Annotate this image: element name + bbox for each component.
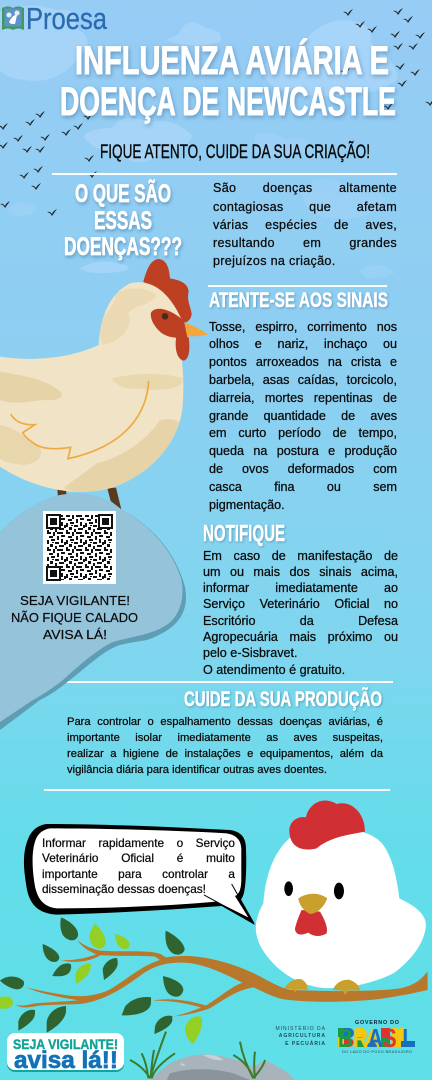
speech bubble text: disseminação dessas doenças! — [42, 882, 206, 896]
QR caption: NÃO FIQUE CALADO — [11, 610, 138, 625]
logo: governo do brasil: GOVERNO DO — [355, 1020, 399, 1026]
text block: notifique: Em caso de manifestação de — [203, 548, 398, 562]
colour blocks — [338, 1028, 415, 1047]
title — [60, 38, 396, 124]
text block: o que são — [212, 181, 397, 268]
twigs — [61, 953, 207, 1009]
branch with leaves — [0, 917, 428, 1044]
divider — [52, 173, 397, 175]
body — [0, 282, 184, 492]
text block: sinais: grande quantidade de aves — [209, 409, 397, 423]
heading: o que são essas doenças — [64, 178, 182, 261]
text block: cuide da produção: importante isolar imediatamente as aves suspeitas, — [67, 732, 383, 744]
face band — [151, 309, 187, 338]
white chicken — [256, 801, 426, 995]
text block: sinais: Tosse, espirro, corrimento nos — [209, 320, 397, 334]
birds — [0, 8, 432, 216]
QR caption — [11, 593, 138, 642]
wattle — [295, 910, 327, 936]
logo: governo do brasil: DO LADO DO POVO BRASILEIRO — [342, 1049, 412, 1054]
comb — [143, 259, 192, 323]
callout blob with QR — [0, 494, 186, 730]
speech bubble text: Veterinário Oficial é muito — [42, 851, 235, 865]
wattle — [176, 335, 189, 361]
blob — [0, 494, 182, 722]
text block: sinais: em curto período de tempo, — [209, 426, 397, 440]
divider — [44, 789, 390, 791]
badge: seja vigilante avisa lá — [7, 1033, 124, 1074]
legs — [57, 488, 121, 509]
logo: Proesa — [2, 1, 108, 36]
text block: o que são: contagiosas que afetam — [213, 200, 397, 214]
logo: ministério da agricultura: AGRICULTURA — [279, 1033, 326, 1039]
text block: notifique: Serviço Veterinário Oficial no — [203, 597, 398, 611]
heading: o que são essas doenças: DOENÇAS??? — [64, 233, 182, 261]
eyes — [284, 881, 293, 896]
text block: o que são: resultando em grandes — [213, 236, 397, 250]
logo: ministério da agricultura: MINISTÉRIO DA — [275, 1025, 326, 1032]
heading: o que são essas doenças: O QUE SÃO — [75, 178, 171, 208]
text block: cuide da produção — [66, 716, 384, 776]
text block: sinais — [209, 320, 397, 512]
text block: sinais: de ovos deformados com — [209, 462, 397, 476]
body — [256, 829, 426, 988]
eye — [162, 313, 168, 320]
text block: o que são: várias espécies de aves, — [213, 218, 397, 232]
logo: ministério da agricultura: E PECUÁRIA — [285, 1040, 326, 1047]
hen illustration — [0, 259, 208, 509]
speech bubble — [24, 824, 255, 925]
text block: cuide da produção: vigilância diária para identificar outras aves doentes. — [67, 764, 327, 776]
text block: sinais: diarreia, mortes repentinas de — [209, 391, 397, 405]
comb — [289, 801, 365, 849]
blob shadow — [0, 494, 186, 730]
plumage texture — [0, 289, 184, 493]
logo: Proesa: Proesa — [26, 1, 108, 36]
logo: ministério da agricultura — [275, 1025, 326, 1047]
text block: notifique: informar imediatamente ao — [203, 581, 398, 595]
text block: o que são: São doenças altamente — [213, 181, 397, 195]
text block: notifique: O atendimento é gratuito. — [203, 663, 345, 677]
speech bubble text: Informar rapidamente o Serviço — [42, 836, 235, 850]
badge: seja vigilante avisa lá: avisa lá!! — [14, 1047, 118, 1074]
text block: sinais: queda na postura e produção — [209, 444, 397, 458]
text block: sinais: pigmentação. — [209, 498, 285, 512]
rock and grass — [130, 1032, 294, 1080]
dark leaves — [0, 917, 185, 1034]
badge: seja vigilante avisa lá: SEJA VIGILANTE! — [13, 1036, 118, 1052]
beak — [185, 323, 208, 336]
feet — [284, 979, 308, 993]
branch — [15, 940, 428, 1017]
text block: notifique — [202, 548, 398, 677]
divider — [52, 681, 393, 683]
text block: cuide da produção: Para controlar o espalhamento dessas doenças aviárias, é — [67, 716, 383, 728]
text block: notifique: um ou mais dos sinais acima, — [203, 565, 398, 579]
QR caption: SEJA VIGILANTE! — [20, 593, 130, 608]
text block: notifique: Escritório da Defesa — [203, 614, 398, 628]
QR caption: AVISA LÁ! — [43, 627, 107, 642]
QR code — [43, 511, 116, 584]
light leaves — [0, 923, 202, 1044]
text block: notifique: pelo e-Sisbravet. — [203, 646, 298, 660]
speech bubble text — [42, 836, 236, 896]
wing outline — [11, 381, 149, 459]
icon: open book — [2, 6, 24, 30]
speech bubble text: importante para controlar a — [42, 867, 235, 881]
clouds background — [0, 5, 398, 278]
text block: o que são: prejuízos na criação. — [213, 254, 336, 268]
text block: sinais: olhos e nariz, inchaço ou — [209, 337, 397, 351]
text block: sinais: barbela, asas caídas, torcicolo, — [209, 373, 397, 387]
heading: o que são essas doenças: ESSAS — [94, 207, 152, 235]
heading: notifique: NOTIFIQUE — [203, 520, 285, 546]
divider — [208, 285, 387, 287]
text block: notifique: Agropecuária mais próximo ou — [203, 630, 398, 644]
beak — [298, 894, 327, 914]
text block: sinais: pontos arroxeados na crista e — [209, 355, 397, 369]
text block: sinais: casca fina ou sem — [209, 480, 397, 494]
logo: governo do brasil: BRASIL — [338, 1023, 415, 1053]
text block: cuide da produção: realizar a higiene de instalações e equipamentos, além da — [67, 748, 383, 760]
